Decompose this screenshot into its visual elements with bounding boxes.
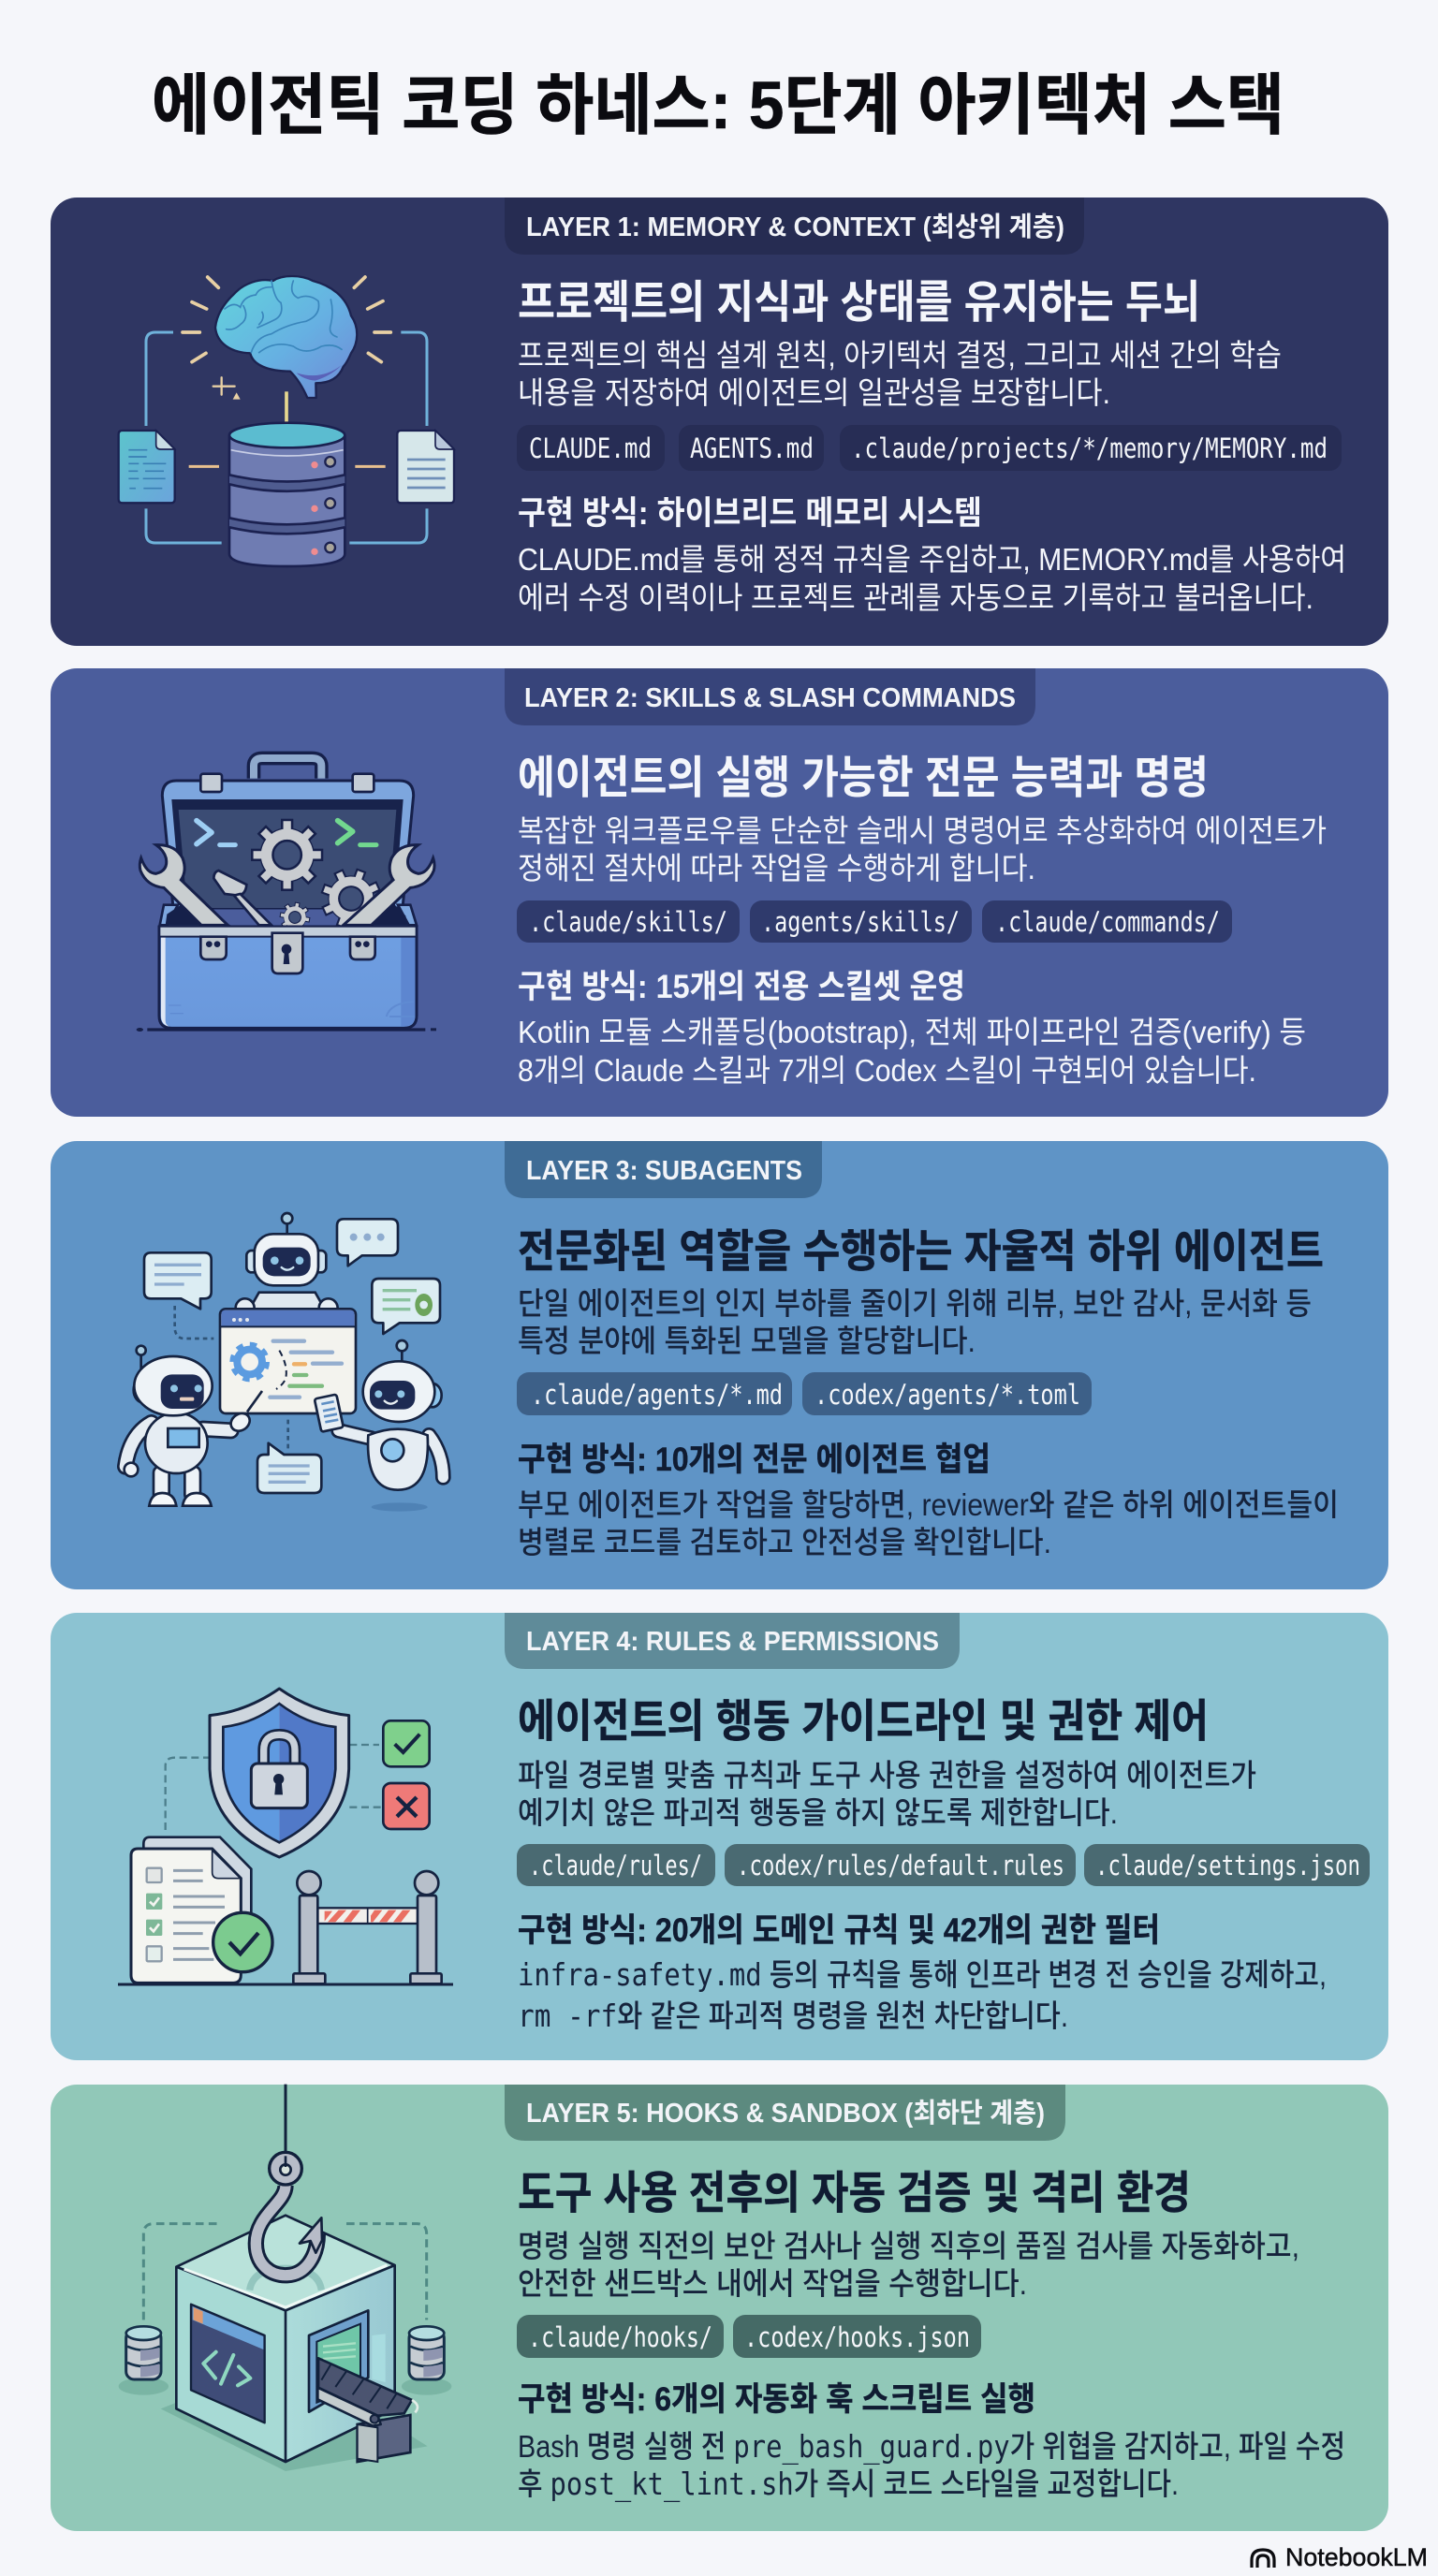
layer 2 file path chips: .claude/commands/ [995, 906, 1220, 938]
layer 1 description [518, 338, 1282, 410]
layer 3 heading: 전문화된 역할을 수행하는 자율적 하위 에이전트 [518, 1227, 1324, 1277]
layer 5 file path chips: .codex/hooks.json [744, 2321, 970, 2353]
layer 1 file path chips: AGENTS.md [690, 432, 814, 464]
layer 2 file path chips: .claude/skills/ [529, 906, 727, 938]
layer 4 description [518, 1758, 1256, 1830]
layer 4 description: 예기치 않은 파괴적 행동을 하지 않도록 제한합니다. [518, 1795, 1118, 1830]
layer 4 heading: 에이전트의 행동 가이드라인 및 권한 제어 [518, 1697, 1209, 1747]
layer 4 implementation text: infra-safety.md 등의 규칙을 통해 인프라 변경 전 승인을 강제하고, [518, 1956, 1327, 1993]
layer 2 implementation text: Kotlin 모듈 스캐폴딩(bootstrap), 전체 파이프라인 검증(verify) 등 [518, 1015, 1306, 1049]
layer 5 file path chips [517, 2315, 981, 2358]
layer 3 implementation heading: 구현 방식: 10개의 전문 에이전트 협업 [518, 1442, 990, 1478]
icon: open toolbox with gears and wrenches [137, 758, 436, 1032]
layer 3 file path chips: .claude/agents/*.md [531, 1379, 783, 1411]
layer 4 implementation text [518, 1956, 1327, 2034]
left robot [125, 1346, 262, 1506]
layer 2 implementation heading: 구현 방식: 15개의 전용 스킬셋 운영 [518, 969, 965, 1005]
layer 5 file path chips: .claude/hooks/ [528, 2321, 712, 2353]
layer 5 implementation text [518, 2428, 1345, 2503]
layer 3 file path chips [517, 1372, 1092, 1415]
layer 2 file path chips [517, 900, 1232, 943]
icon: hook over glass sandbox cube [119, 2085, 451, 2471]
layer 1 implementation text: CLAUDE.md를 통해 정적 규칙을 주입하고, MEMORY.md를 사용하여 [518, 542, 1346, 577]
panel: layer 4 rules and permissions [51, 1613, 1388, 2060]
layer 1 file path chips: CLAUDE.md [529, 432, 652, 464]
layer 5 description: 안전한 샌드박스 내에서 작업을 수행합니다. [518, 2266, 1027, 2301]
layer 1 file path chips: .claude/projects/*/memory/MEMORY.md [851, 432, 1328, 464]
panel: layer 2 skills and slash commands [51, 668, 1388, 1117]
panel: layer 3 subagents [51, 1141, 1388, 1589]
layer 4 file path chips: .claude/settings.json [1095, 1850, 1360, 1881]
layer 2 implementation text [518, 1015, 1306, 1088]
layer 2 description: 정해진 절차에 따라 작업을 수행하게 합니다. [518, 851, 1035, 886]
layer 4 file path chips: .codex/rules/default.rules [737, 1850, 1064, 1881]
layer 2 description: 복잡한 워크플로우를 단순한 슬래시 명령어로 추상화하여 에이전트가 [518, 813, 1327, 848]
panel 4 background [51, 1613, 1388, 2060]
panel: layer 1 memory and context [51, 198, 1388, 646]
layer 4 tab [505, 1613, 960, 1669]
NotebookLM footer logo: NotebookLM [1285, 2543, 1428, 2571]
layer 1 implementation heading: 구현 방식: 하이브리드 메모리 시스템 [518, 495, 982, 532]
layer 1 description: 프로젝트의 핵심 설계 원칙, 아키텍처 결정, 그리고 세션 간의 학습 [518, 338, 1282, 373]
top robot [236, 1213, 338, 1317]
title: 에이전틱 코딩 하네스: 5단계 아키텍처 스택 [152, 69, 1284, 143]
layer 5 tab: LAYER 5: HOOKS & SANDBOX (최하단 계층) [526, 2098, 1045, 2129]
layer 2 tab: LAYER 2: SKILLS & SLASH COMMANDS [524, 683, 1016, 713]
layer 4 tab: LAYER 4: RULES & PERMISSIONS [526, 1627, 939, 1657]
layer 3 description: 특정 분야에 특화된 모델을 할당합니다. [518, 1324, 976, 1358]
layer 4 file path chips: .claude/rules/ [529, 1850, 702, 1881]
central screen [220, 1309, 356, 1413]
layer 2 file path chips: .agents/skills/ [761, 906, 960, 938]
layer 1 file path chips [517, 425, 1342, 471]
layer 2 implementation text: 8개의 Claude 스킬과 7개의 Codex 스킬이 구현되어 있습니다. [518, 1053, 1256, 1088]
layer 5 description: 명령 실행 직전의 보안 검사나 실행 직후의 품질 검사를 자동화하고, [518, 2229, 1299, 2263]
layer 3 implementation text: 부모 에이전트가 작업을 할당하면, reviewer와 같은 하위 에이전트들이 [518, 1487, 1339, 1522]
layer 2 description [518, 813, 1327, 886]
layer 3 tab: LAYER 3: SUBAGENTS [526, 1156, 802, 1186]
layer 5 implementation text: Bash 명령 실행 전 pre_bash_guard.py가 위협을 감지하고, 파일 수정 [518, 2428, 1345, 2466]
layer 4 description: 파일 경로별 맞춤 규칙과 도구 사용 권한을 설정하여 에이전트가 [518, 1758, 1256, 1793]
panel: layer 5 hooks and sandbox [51, 2085, 1388, 2531]
layer 3 description [518, 1286, 1312, 1358]
layer 4 implementation text: rm -rf와 같은 파괴적 명령을 원천 차단합니다. [518, 1998, 1068, 2034]
layer 3 file path chips: .codex/agents/*.toml [814, 1379, 1080, 1411]
layer 5 implementation text: 후 post_kt_lint.sh가 즉시 코드 스타일을 교정합니다. [518, 2466, 1179, 2503]
panel 1 background [51, 198, 1388, 646]
layer 4 file path chips [517, 1844, 1370, 1886]
layer 1 implementation text: 에러 수정 이력이나 프로젝트 관례를 자동으로 기록하고 불러옵니다. [518, 580, 1313, 615]
layer 3 tab [505, 1141, 822, 1198]
layer 2 tab [505, 668, 1035, 725]
layer 1 tab [505, 198, 1084, 255]
layer 1 description: 내용을 저장하여 에이전트의 일관성을 보장합니다. [518, 375, 1110, 410]
panel 5 background [51, 2085, 1388, 2531]
layer 1 heading: 프로젝트의 지식과 상태를 유지하는 두뇌 [518, 278, 1200, 328]
panel 2 background [51, 668, 1388, 1117]
layer 3 implementation text [518, 1487, 1339, 1559]
layer 1 tab: LAYER 1: MEMORY & CONTEXT (최상위 계층) [526, 212, 1064, 242]
layer 5 description [518, 2229, 1299, 2301]
icon: brain over database with documents [119, 276, 454, 566]
icon: three robots collaborating around a screen [125, 1213, 443, 1512]
layer 5 implementation heading: 구현 방식: 6개의 자동화 훅 스크립트 실행 [518, 2381, 1035, 2418]
layer 5 tab [505, 2085, 1065, 2141]
right robot [315, 1340, 443, 1490]
layer 4 implementation heading: 구현 방식: 20개의 도메인 규칙 및 42개의 권한 필터 [518, 1912, 1160, 1949]
icon: shield with padlock, checklist and barrier [118, 1689, 453, 1984]
layer 5 heading: 도구 사용 전후의 자동 검증 및 격리 환경 [518, 2169, 1191, 2218]
layer 2 heading: 에이전트의 실행 가능한 전문 능력과 명령 [518, 754, 1209, 803]
layer 3 implementation text: 병렬로 코드를 검토하고 안전성을 확인합니다. [518, 1525, 1051, 1559]
speech bubbles [144, 1219, 440, 1493]
layer 1 implementation text [518, 542, 1346, 615]
layer 3 description: 단일 에이전트의 인지 부하를 줄이기 위해 리뷰, 보안 감사, 문서화 등 [518, 1286, 1312, 1321]
panel 3 background [51, 1141, 1388, 1589]
